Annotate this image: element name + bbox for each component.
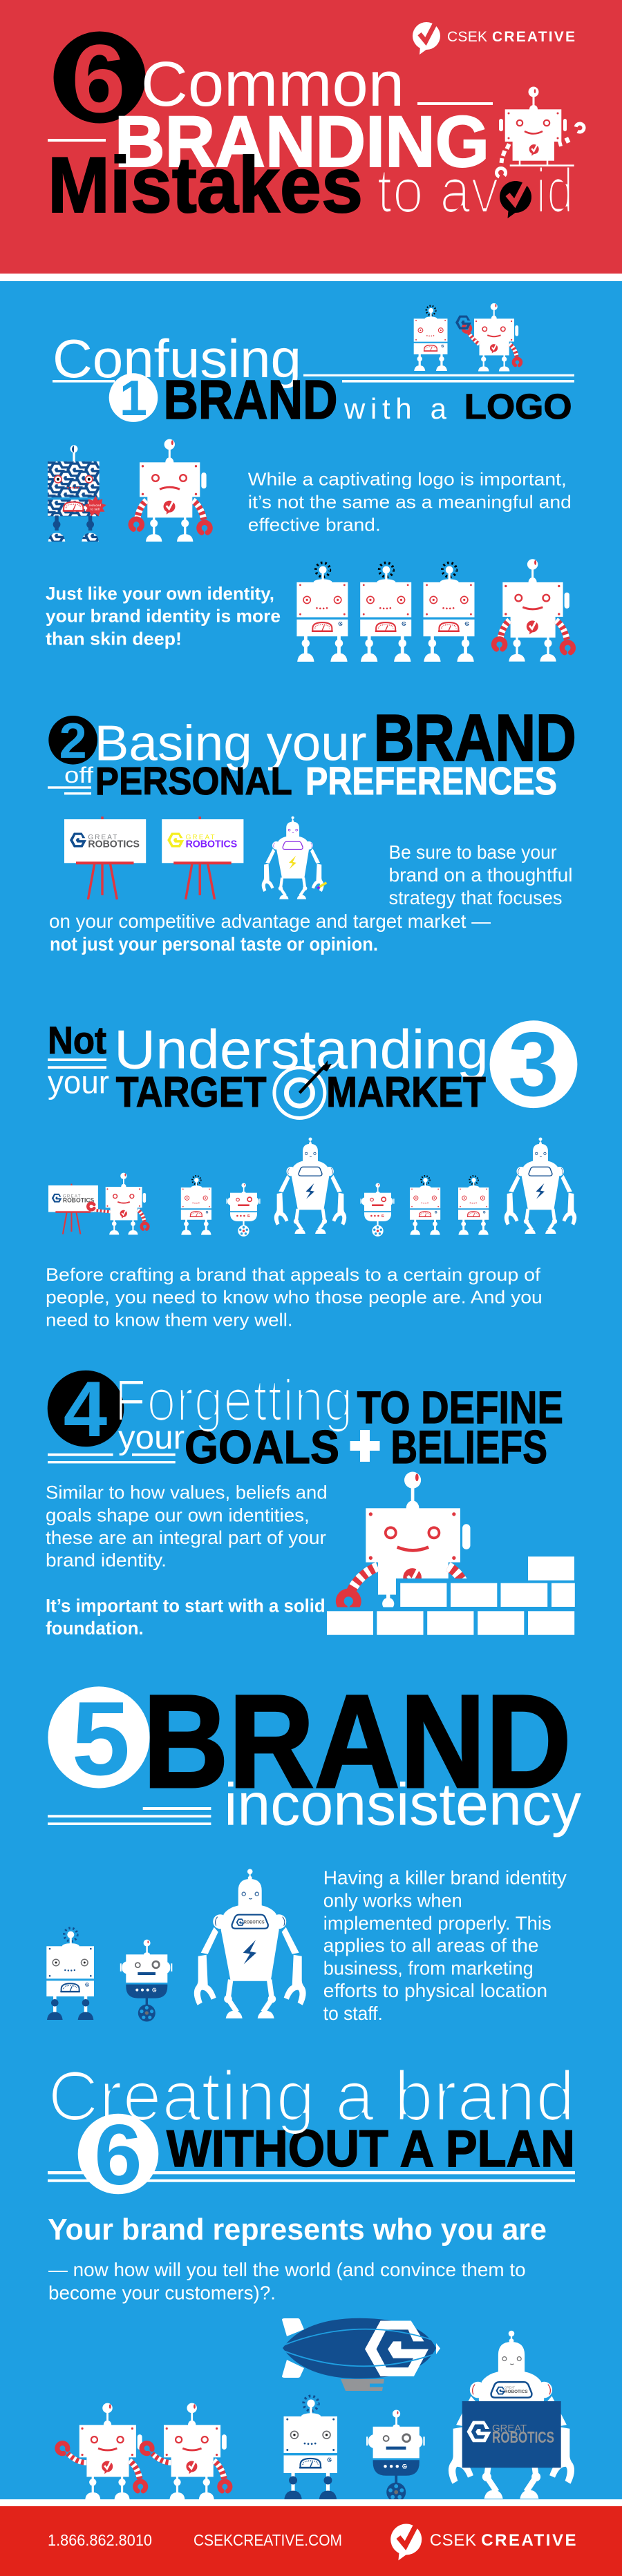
heading: Forgetting your GOALS + BELIEFS: Forgetting [114, 1368, 353, 1433]
heading: Forgetting your GOALS + BELIEFS: GOALS [185, 1421, 339, 1473]
heading: Creating a brand WITHOUT A PLAN: 6 [95, 2108, 142, 2203]
robot: tall bot holding brand sign: ROBOTICS [505, 2389, 528, 2394]
robots: crowd and easel [48, 1138, 576, 1237]
title: Common BRANDING Mistakes to avoid: Mistakes [48, 142, 363, 229]
heading: BRAND inconsistency [48, 1667, 581, 1838]
icon: branded blimp [282, 2318, 440, 2391]
text: know your audience: people, you need to know who those people are. And you [46, 1287, 543, 1308]
text: logo vs brand: effective brand. [248, 514, 381, 535]
robots: three mismatched robots: ROBOTICS [244, 1921, 265, 1925]
text: know your audience: need to know them very well. [46, 1309, 293, 1330]
robot: builder behind brick wall [336, 1471, 470, 1607]
bricks: wall [327, 1556, 575, 1635]
text: website: CSEKCREATIVE.COM [194, 2531, 342, 2549]
text: solid foundation: foundation. [46, 1618, 144, 1639]
panel: header [0, 0, 622, 281]
panel: mistake 1 [46, 303, 575, 662]
text: logo vs brand: While a captivating logo is important, [248, 468, 567, 489]
number badge 3 [490, 1013, 577, 1115]
heading: Forgetting your GOALS + BELIEFS: BELIEFS [390, 1421, 547, 1473]
robot: patterned imitation: to sell [91, 508, 100, 512]
robot: painter with brush [262, 817, 326, 899]
heading: Not Understanding your TARGET MARKET: MARKET [326, 1069, 486, 1116]
heading: Basing your BRAND off PERSONAL PREFERENCES: PERSONAL [95, 759, 292, 803]
panel: mistake 6 [48, 2058, 575, 2502]
robot: tall bot holding brand sign: GREAT [505, 2385, 515, 2389]
title: Common BRANDING Mistakes to avoid: BRANDING [115, 102, 489, 182]
heading: Basing your BRAND off PERSONAL PREFERENCES: PREFERENCES [305, 759, 557, 803]
heading: Confusing BRAND with a LOGO: with a [343, 392, 447, 425]
text: solid foundation [46, 1595, 326, 1639]
heading: Not Understanding your TARGET MARKET: TARGET [116, 1069, 267, 1116]
heading: Forgetting your GOALS + BELIEFS: 4 [64, 1366, 107, 1453]
robot: tall bot holding brand sign: ROBOTICS [492, 2428, 554, 2446]
text: implementation paragraph: Having a killer brand identity [323, 1867, 567, 1889]
robot mascot on platform [495, 87, 585, 179]
robots: three mismatched robots [46, 1869, 306, 2021]
logo: Csek Creative: CSEK [430, 2531, 476, 2550]
heading: BRAND inconsistency: BRAND [143, 1667, 572, 1815]
text: skin deep: your brand identity is more [46, 606, 281, 627]
heading: Basing your BRAND off PERSONAL PREFERENCES [48, 701, 576, 803]
text: implementation paragraph: to staff. [323, 2003, 383, 2024]
easel: navy logo concept [64, 817, 146, 899]
text: tell the world: — now how will you tell the world (and convince them to [48, 2259, 526, 2280]
text: strategy paragraph right: brand on a thoughtful [388, 864, 572, 886]
text: values and goals: brand identity. [46, 1550, 167, 1571]
easel: navy logo concept: ROBOTICS [88, 839, 140, 850]
heading: Not Understanding your TARGET MARKET: your [48, 1065, 109, 1100]
text: logo vs brand [248, 468, 572, 535]
text: implementation paragraph: implemented properly. This [323, 1912, 552, 1934]
text: strategy paragraph right: Be sure to base your [388, 841, 557, 863]
text: brand represents who you are: Your brand represents who you are [48, 2213, 547, 2246]
heading: Confusing BRAND with a LOGO: Confusing [53, 328, 301, 389]
text: tell the world [48, 2259, 526, 2303]
text: strategy paragraph right [388, 841, 572, 908]
heading: Not Understanding your TARGET MARKET: Understanding [114, 1019, 489, 1080]
text: values and goals: Similar to how values, beliefs and [46, 1482, 328, 1502]
robot: tall bot holding brand sign: GREAT [492, 2423, 527, 2434]
text: skin deep [46, 583, 281, 649]
robot: sad checkmark bot [129, 439, 212, 542]
robot: patterned imitation: reduced [89, 504, 102, 508]
heading: Confusing BRAND with a LOGO: LOGO [464, 387, 572, 426]
logo: Csek Creative: CREATIVE [481, 2531, 576, 2550]
text: know your audience [46, 1264, 543, 1330]
number badge 6 [54, 24, 145, 133]
panel: mistake 4 [46, 1366, 575, 1639]
text: solid foundation: It’s important to start with a solid [46, 1595, 326, 1616]
text: values and goals [46, 1482, 328, 1571]
text: strategy paragraph bottom: on your competitive advantage and target market — [49, 910, 491, 932]
text: implementation paragraph [323, 1867, 567, 2024]
easel: yellow and purple logo concept [162, 817, 243, 899]
title: Common BRANDING Mistakes to avoid: Common [141, 49, 404, 120]
text: strategy paragraph right: strategy that focuses [388, 887, 563, 908]
text: implementation paragraph: business, from marketing [323, 1957, 534, 1978]
easel: navy logo concept: GREAT [88, 834, 117, 841]
easel: yellow and purple logo concept: ROBOTICS [186, 839, 237, 850]
text: phone number: 1.866.862.8010 [48, 2531, 152, 2549]
text: logo vs brand: it’s not the same as a meaningful and [248, 491, 572, 512]
title: Common BRANDING Mistakes to avoid: id [536, 157, 574, 226]
heading: Not Understanding your TARGET MARKET [48, 1018, 489, 1116]
heading: Forgetting your GOALS + BELIEFS [48, 1366, 563, 1473]
text: implementation paragraph: applies to all areas of the [323, 1935, 539, 1956]
title: Common BRANDING Mistakes to avoid: to av [377, 157, 499, 226]
heading: Basing your BRAND off PERSONAL PREFERENCES: 2 [59, 714, 87, 769]
heading: Forgetting your GOALS + BELIEFS: your [118, 1420, 185, 1456]
heading: BRAND inconsistency: 5 [72, 1680, 130, 1797]
heading: Confusing BRAND with a LOGO: 1 [120, 371, 147, 426]
title: Common BRANDING Mistakes to avoid [48, 49, 574, 229]
panel: mistake 5 [46, 1667, 581, 2024]
robots: crowd and easel: ROBOTICS [63, 1197, 94, 1204]
heading: Basing your BRAND off PERSONAL PREFERENCES: Basing your [95, 716, 367, 772]
logo: Csek Creative [390, 2524, 576, 2560]
logo: Csek Creative: CSEK [447, 29, 487, 45]
robot: tall bot holding brand sign [449, 2331, 574, 2499]
text: strategy paragraph bottom: not just your personal taste or opinion. [50, 933, 378, 955]
heading: Creating a brand WITHOUT A PLAN: WITHOUT A PLAN [167, 2119, 575, 2177]
text: strategy paragraph bottom [49, 910, 491, 955]
heading: Confusing BRAND with a LOGO: BRAND [163, 369, 337, 430]
text: know your audience: Before crafting a brand that appeals to a certain group of [46, 1264, 541, 1285]
easel: yellow and purple logo concept: GREAT [186, 834, 215, 841]
logo: Csek Creative [413, 22, 575, 55]
heading: Basing your BRAND off PERSONAL PREFERENCES: off [64, 763, 93, 788]
heading: Confusing BRAND with a LOGO [53, 328, 574, 430]
text: values and goals: goals shape our own identities, [46, 1505, 310, 1526]
robots: crowd and easel: GREAT [63, 1194, 81, 1199]
robots: row of three gauge bots and one checkmark bot [296, 559, 575, 662]
text: values and goals: these are an integral part of your [46, 1527, 326, 1548]
text: implementation paragraph: only works when [323, 1890, 462, 1911]
robots: gauge bot and checkmark bot holding a logo [414, 303, 522, 371]
robots: branded team [53, 2396, 425, 2502]
panel: mistake 3 [46, 1013, 577, 1330]
heading: Creating a brand WITHOUT A PLAN: Creating a brand [48, 2058, 575, 2135]
heading: Creating a brand WITHOUT A PLAN [48, 2058, 575, 2203]
number badge 6: 6 [72, 24, 125, 133]
panel: mistake 2 [48, 701, 576, 955]
text: skin deep: than skin deep! [46, 629, 182, 649]
logo: Csek Creative: CREATIVE [492, 29, 575, 45]
robot: patterned imitation [48, 445, 106, 542]
text: tell the world: become your customers)?. [48, 2282, 276, 2303]
heading: BRAND inconsistency: inconsistency [224, 1772, 581, 1838]
text: skin deep: Just like your own identity, [46, 583, 274, 604]
icon: target with dart [274, 1060, 332, 1118]
panel: footer [0, 2499, 622, 2576]
heading: Not Understanding your TARGET MARKET: Not [48, 1018, 106, 1062]
heading: Basing your BRAND off PERSONAL PREFERENCES: BRAND [374, 701, 576, 775]
text: implementation paragraph: efforts to physical location [323, 1980, 547, 2001]
heading: Forgetting your GOALS + BELIEFS: TO DEFINE [357, 1382, 563, 1433]
number badge 3: 3 [508, 1013, 559, 1115]
